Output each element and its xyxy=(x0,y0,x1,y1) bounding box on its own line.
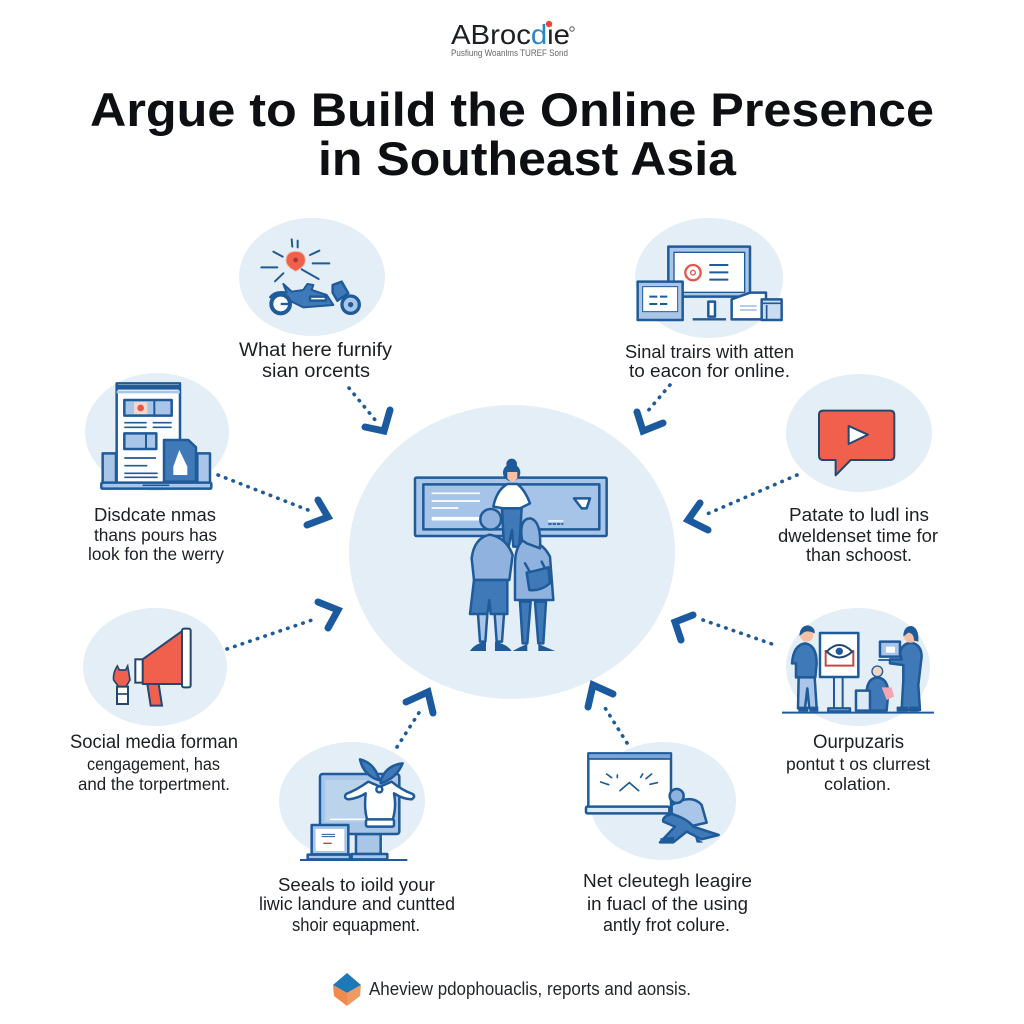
arrow: bottom left xyxy=(397,692,433,747)
logo: ABrocdie xyxy=(451,19,570,50)
title: Argue to Build the Online Presence xyxy=(90,83,934,136)
footer note xyxy=(333,973,691,1006)
text block: pontut t os clurrest xyxy=(786,754,930,774)
icon: presenters with eye board xyxy=(782,625,934,713)
text block: Patate to ludl ins xyxy=(789,505,929,525)
icon: newspaper page xyxy=(101,383,211,489)
icon: monitor and devices xyxy=(638,247,782,320)
panel: screen and seated figure xyxy=(583,742,752,935)
icon: projection screen and seated figure xyxy=(586,753,719,843)
text block: to eacon for online. xyxy=(629,361,790,381)
text block xyxy=(786,732,930,794)
panel: motorbike xyxy=(239,218,393,382)
text block xyxy=(239,340,393,382)
text block: shoir equapment. xyxy=(292,915,420,935)
footer note: Aheview pdophouaclis, reports and aonsis. xyxy=(369,978,691,999)
arrow: lower left xyxy=(227,602,338,649)
text block: Ourpuzaris xyxy=(813,732,904,753)
panel: megaphone xyxy=(70,608,238,794)
text block: Social media forman xyxy=(70,732,238,753)
icon: footer cube xyxy=(333,973,361,1006)
icon: desktop with plant figure xyxy=(300,759,414,860)
icon: video speech bubble xyxy=(819,411,894,475)
text block xyxy=(583,870,752,935)
text block: in fuacl of the using xyxy=(587,894,748,914)
panel: presenters xyxy=(782,608,934,794)
text block: look fon the werry xyxy=(88,544,224,564)
arrow: middle right xyxy=(688,475,797,530)
arrow: middle left xyxy=(218,475,328,525)
text block: What here furnify xyxy=(239,340,393,361)
panel: desktop and plant xyxy=(259,742,455,935)
icon: megaphone xyxy=(113,629,191,706)
text block xyxy=(70,732,238,794)
text block: liwic landure and cuntted xyxy=(259,894,455,914)
text block: Disdcate nmas xyxy=(94,504,216,525)
text block: colation. xyxy=(824,774,891,794)
arrow: top left xyxy=(349,388,390,431)
text block: and the torpertment. xyxy=(78,774,230,794)
text block xyxy=(259,875,455,935)
panel: news page xyxy=(85,373,229,564)
arrow: top right xyxy=(637,385,670,431)
text block: than schoost. xyxy=(806,545,912,565)
text block xyxy=(88,504,224,564)
text block xyxy=(778,505,938,565)
arrow: bottom right xyxy=(588,685,627,743)
text block: Seeals to ioild your xyxy=(278,875,435,895)
icon: motorbike and beacon xyxy=(261,239,359,313)
text block: sian orcents xyxy=(262,361,370,382)
title xyxy=(90,83,934,185)
arrow: lower right xyxy=(675,615,775,645)
icon: people at a board xyxy=(415,459,607,651)
title: in Southeast Asia xyxy=(318,132,737,185)
text block xyxy=(625,342,794,381)
panel: central hub xyxy=(349,405,675,699)
text block: antly frot colure. xyxy=(603,915,730,935)
text block: Sinal trairs with atten xyxy=(625,342,794,362)
text block: thans pours has xyxy=(94,525,217,545)
text block: dweldenset time for xyxy=(778,526,938,546)
text block: Net cleutegh leagire xyxy=(583,870,752,891)
panel: video xyxy=(778,374,938,565)
panel: devices xyxy=(625,218,794,381)
logo: Pusfiung Woanlms TUREF Sond xyxy=(451,48,568,58)
text block: cengagement, has xyxy=(87,754,220,774)
